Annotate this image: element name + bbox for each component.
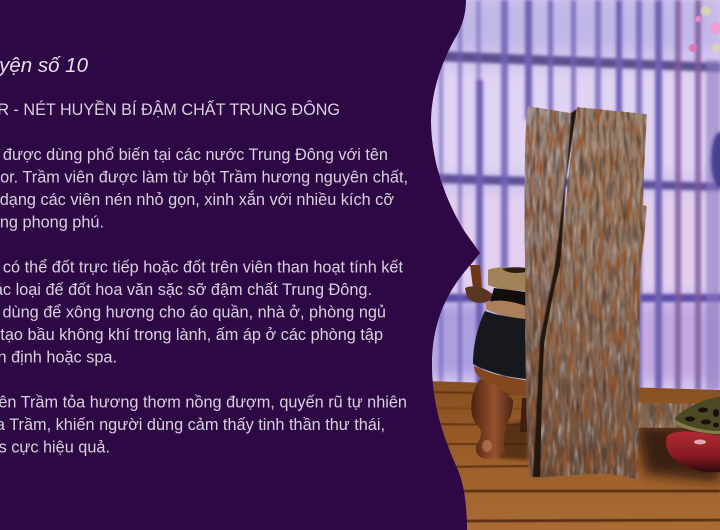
paragraph 2 bbox=[0, 259, 403, 367]
table bbox=[425, 381, 720, 530]
crack shadow between slabs bbox=[533, 109, 577, 477]
incense burner bbox=[465, 265, 527, 459]
paragraph 3 bbox=[0, 394, 407, 457]
panel: purple wavy text background bbox=[0, 0, 480, 530]
agarwood slab: left bbox=[524, 106, 571, 477]
text content bbox=[0, 54, 408, 457]
paragraph 1 bbox=[0, 146, 408, 232]
photo: agarwood slabs and burner on a table bbox=[425, 0, 720, 530]
red censer with gold lid bbox=[666, 397, 720, 472]
window screen backdrop bbox=[425, 0, 720, 395]
blossoms bbox=[689, 6, 720, 52]
agarwood slab: right bbox=[540, 107, 647, 480]
